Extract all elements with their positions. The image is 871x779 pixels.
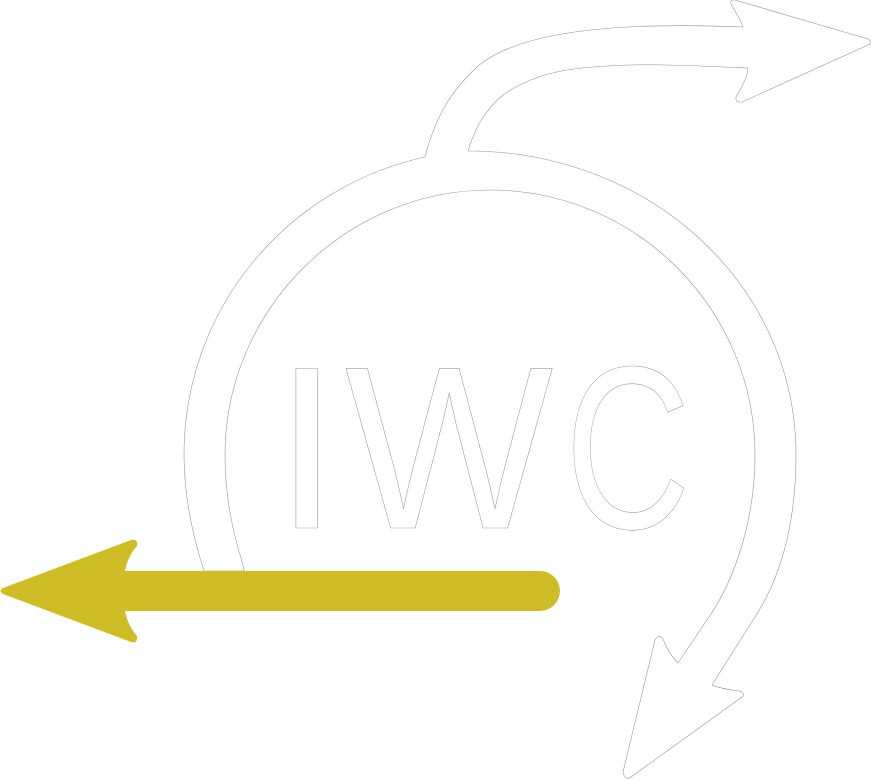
icon: circular white arrow with two heads	[184, 0, 870, 778]
text: IWC outlined letters: C	[565, 319, 691, 578]
text: IWC outlined letters	[274, 318, 691, 578]
text: IWC outlined letters: I	[274, 319, 339, 578]
text: IWC outlined letters: W	[345, 318, 553, 577]
arrow: gold left-pointing arrow	[0, 540, 560, 642]
